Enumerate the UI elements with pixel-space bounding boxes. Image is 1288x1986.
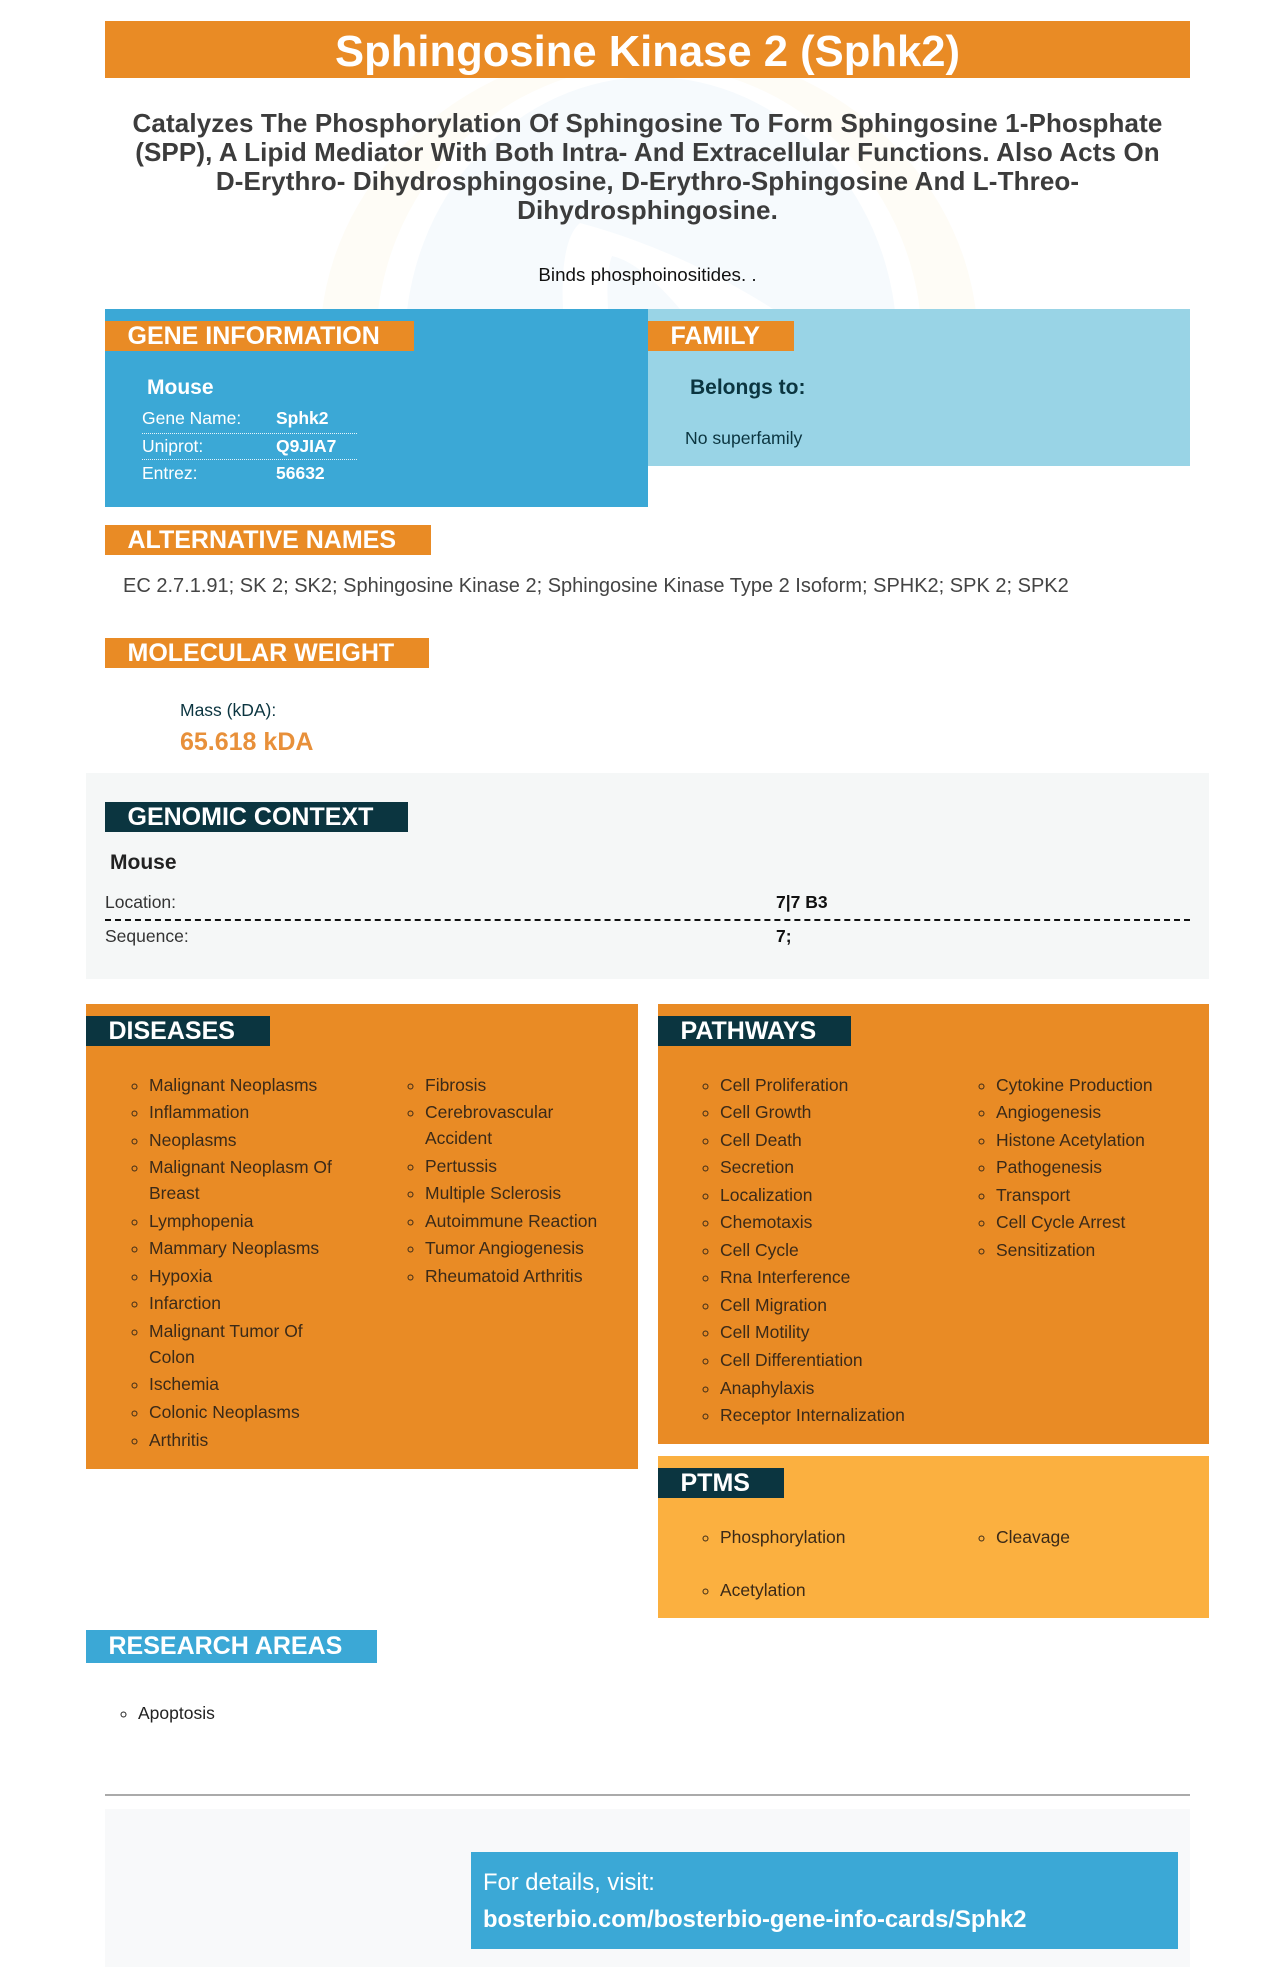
panel: ptms <box>658 1456 1209 1618</box>
pathways list column 1: Cell Migration <box>720 1295 827 1315</box>
alternative names text: EC 2.7.1.91; SK 2; SK2; Sphingosine Kinase 2; Sphingosine Kinase Type 2 Isoform; SPHK2; SPK 2; SPK2 <box>123 575 1069 597</box>
ptm item: Phosphorylation <box>720 1526 846 1546</box>
panel: gene information <box>105 309 648 507</box>
callout label: For details, visit: <box>483 1869 655 1896</box>
subtitle description: (SPP), A Lipid Mediator With Both Intra- And Extracellular Functions. Also Acts On <box>135 136 1160 166</box>
gene name row: Sphk2 <box>276 408 329 428</box>
research areas list: Apoptosis <box>138 1702 215 1722</box>
diseases list column 1: Malignant Tumor Of <box>149 1321 303 1341</box>
heading: ptms <box>658 1468 784 1498</box>
heading: pathways <box>658 1016 851 1046</box>
function note: Binds phosphoinositides. . <box>538 264 757 285</box>
heading: pathways: PATHWAYS <box>680 1017 816 1045</box>
heading: ptms: PTMS <box>680 1469 750 1497</box>
diseases list column 2: Tumor Angiogenesis <box>425 1238 584 1258</box>
pathways list column 2: Angiogenesis <box>996 1102 1101 1122</box>
background watermark logo <box>322 78 976 309</box>
uniprot row: Q9JIA7 <box>276 436 336 456</box>
panel: genomic context <box>86 773 1209 979</box>
pathways list column 1: Cell Death <box>720 1130 802 1150</box>
diseases list column 1: Malignant Neoplasm Of <box>149 1157 332 1177</box>
gene name row <box>142 406 357 434</box>
pathways list column 1: Cell Growth <box>720 1102 811 1122</box>
pathways list column 1: Cell Cycle <box>720 1240 799 1260</box>
diseases list column 2 <box>408 1074 597 1286</box>
belongs to label: Belongs to: <box>690 376 806 399</box>
panel: pathways <box>658 1004 1209 1444</box>
pathways list column 2: Pathogenesis <box>996 1157 1102 1177</box>
panel: family <box>648 309 1190 466</box>
diseases list column 1: Mammary Neoplasms <box>149 1238 319 1258</box>
panel: diseases <box>86 1004 638 1469</box>
sequence row: Sequence: <box>105 926 189 946</box>
pathways list column 2: Cell Cycle Arrest <box>996 1212 1125 1232</box>
ptm item: Acetylation <box>720 1580 806 1600</box>
pathways list column 1 <box>702 1074 905 1425</box>
footer divider <box>105 1794 1190 1796</box>
title banner: Sphingosine Kinase 2 (Sphk2) <box>335 28 960 76</box>
mass value: 65.618 kDA <box>180 728 313 756</box>
subtitle description <box>133 108 1162 224</box>
heading: genomic context: GENOMIC CONTEXT <box>128 803 373 831</box>
heading: family <box>648 321 794 351</box>
pathways list column 2: Transport <box>996 1185 1070 1205</box>
callout url: bosterbio.com/bosterbio-gene-info-cards/Sphk2 <box>483 1906 1026 1933</box>
panel: footer <box>105 1809 1190 1967</box>
uniprot row <box>142 434 357 460</box>
uniprot row: Uniprot: <box>142 436 203 456</box>
diseases list column 2: Pertussis <box>425 1156 497 1176</box>
pathways list column 2 <box>978 1074 1153 1260</box>
row divider <box>105 919 1190 921</box>
species label: Mouse <box>110 851 177 874</box>
title banner <box>105 21 1190 78</box>
callout: details link <box>471 1852 1178 1949</box>
location row <box>105 892 828 912</box>
heading: family: FAMILY <box>670 322 760 350</box>
diseases list column 1: Neoplasms <box>149 1130 237 1150</box>
sequence row <box>105 926 792 946</box>
heading: research areas <box>86 1630 377 1663</box>
diseases list column 2: Multiple Sclerosis <box>425 1183 561 1203</box>
pathways list column 1: Rna Interference <box>720 1267 850 1287</box>
diseases list column 2: Autoimmune Reaction <box>425 1211 597 1231</box>
pathways list column 1: Secretion <box>720 1157 794 1177</box>
pathways list column 2: Histone Acetylation <box>996 1130 1145 1150</box>
mass label: Mass (kDA): <box>180 700 276 720</box>
diseases list column 1: Ischemia <box>149 1374 219 1394</box>
subtitle description: Dihydrosphingosine. <box>517 194 778 224</box>
gene name row: Gene Name: <box>142 408 241 428</box>
pathways list column 1: Anaphylaxis <box>720 1378 814 1398</box>
diseases list column 2: Rheumatoid Arthritis <box>425 1266 583 1286</box>
entrez row: 56632 <box>276 462 325 482</box>
location row: 7|7 B3 <box>776 892 828 912</box>
subtitle description: D-Erythro- Dihydrosphingosine, D-Erythro-Sphingosine And L-Threo- <box>216 166 1079 196</box>
species label: Mouse <box>147 376 214 399</box>
pathways list column 1: Cell Proliferation <box>720 1074 848 1094</box>
pathways list column 1: Localization <box>720 1185 812 1205</box>
pathways list column 1: Cell Motility <box>720 1322 809 1342</box>
heading: diseases <box>86 1016 270 1046</box>
diseases list column 1 <box>132 1074 332 1450</box>
diseases list column 1: Inflammation <box>149 1102 249 1122</box>
diseases list column 1: Breast <box>149 1183 200 1203</box>
diseases list column 1: Colonic Neoplasms <box>149 1402 300 1422</box>
heading: research areas: RESEARCH AREAS <box>108 1632 342 1660</box>
pathways list column 2: Sensitization <box>996 1240 1095 1260</box>
pathways list column 1: Receptor Internalization <box>720 1405 905 1425</box>
heading: alternative names: ALTERNATIVE NAMES <box>128 526 396 554</box>
diseases list column 2: Cerebrovascular <box>425 1102 553 1122</box>
superfamily value: No superfamily <box>685 428 802 448</box>
sequence row: 7; <box>776 926 792 946</box>
heading: gene information: GENE INFORMATION <box>128 322 380 350</box>
location row: Location: <box>105 892 176 912</box>
diseases list column 1: Colon <box>149 1347 195 1367</box>
subtitle description: Catalyzes The Phosphorylation Of Sphingosine To Form Sphingosine 1-Phosphate <box>133 108 1162 138</box>
diseases list column 1: Malignant Neoplasms <box>149 1074 317 1094</box>
diseases list column 2: Accident <box>425 1128 492 1148</box>
diseases list column 1: Hypoxia <box>149 1266 212 1286</box>
pathways list column 1: Chemotaxis <box>720 1212 812 1232</box>
diseases list column 1: Lymphopenia <box>149 1211 253 1231</box>
pathways list column 2: Cytokine Production <box>996 1074 1153 1094</box>
entrez row <box>142 462 325 482</box>
heading: diseases: DISEASES <box>108 1017 235 1045</box>
heading: molecular weight: MOLECULAR WEIGHT <box>128 639 394 667</box>
diseases list column 2: Fibrosis <box>425 1074 486 1094</box>
entrez row: Entrez: <box>142 462 197 482</box>
ptm item: Cleavage <box>996 1526 1070 1546</box>
diseases list column 1: Infarction <box>149 1293 221 1313</box>
diseases list column 1: Arthritis <box>149 1430 208 1450</box>
pathways list column 1: Cell Differentiation <box>720 1350 863 1370</box>
